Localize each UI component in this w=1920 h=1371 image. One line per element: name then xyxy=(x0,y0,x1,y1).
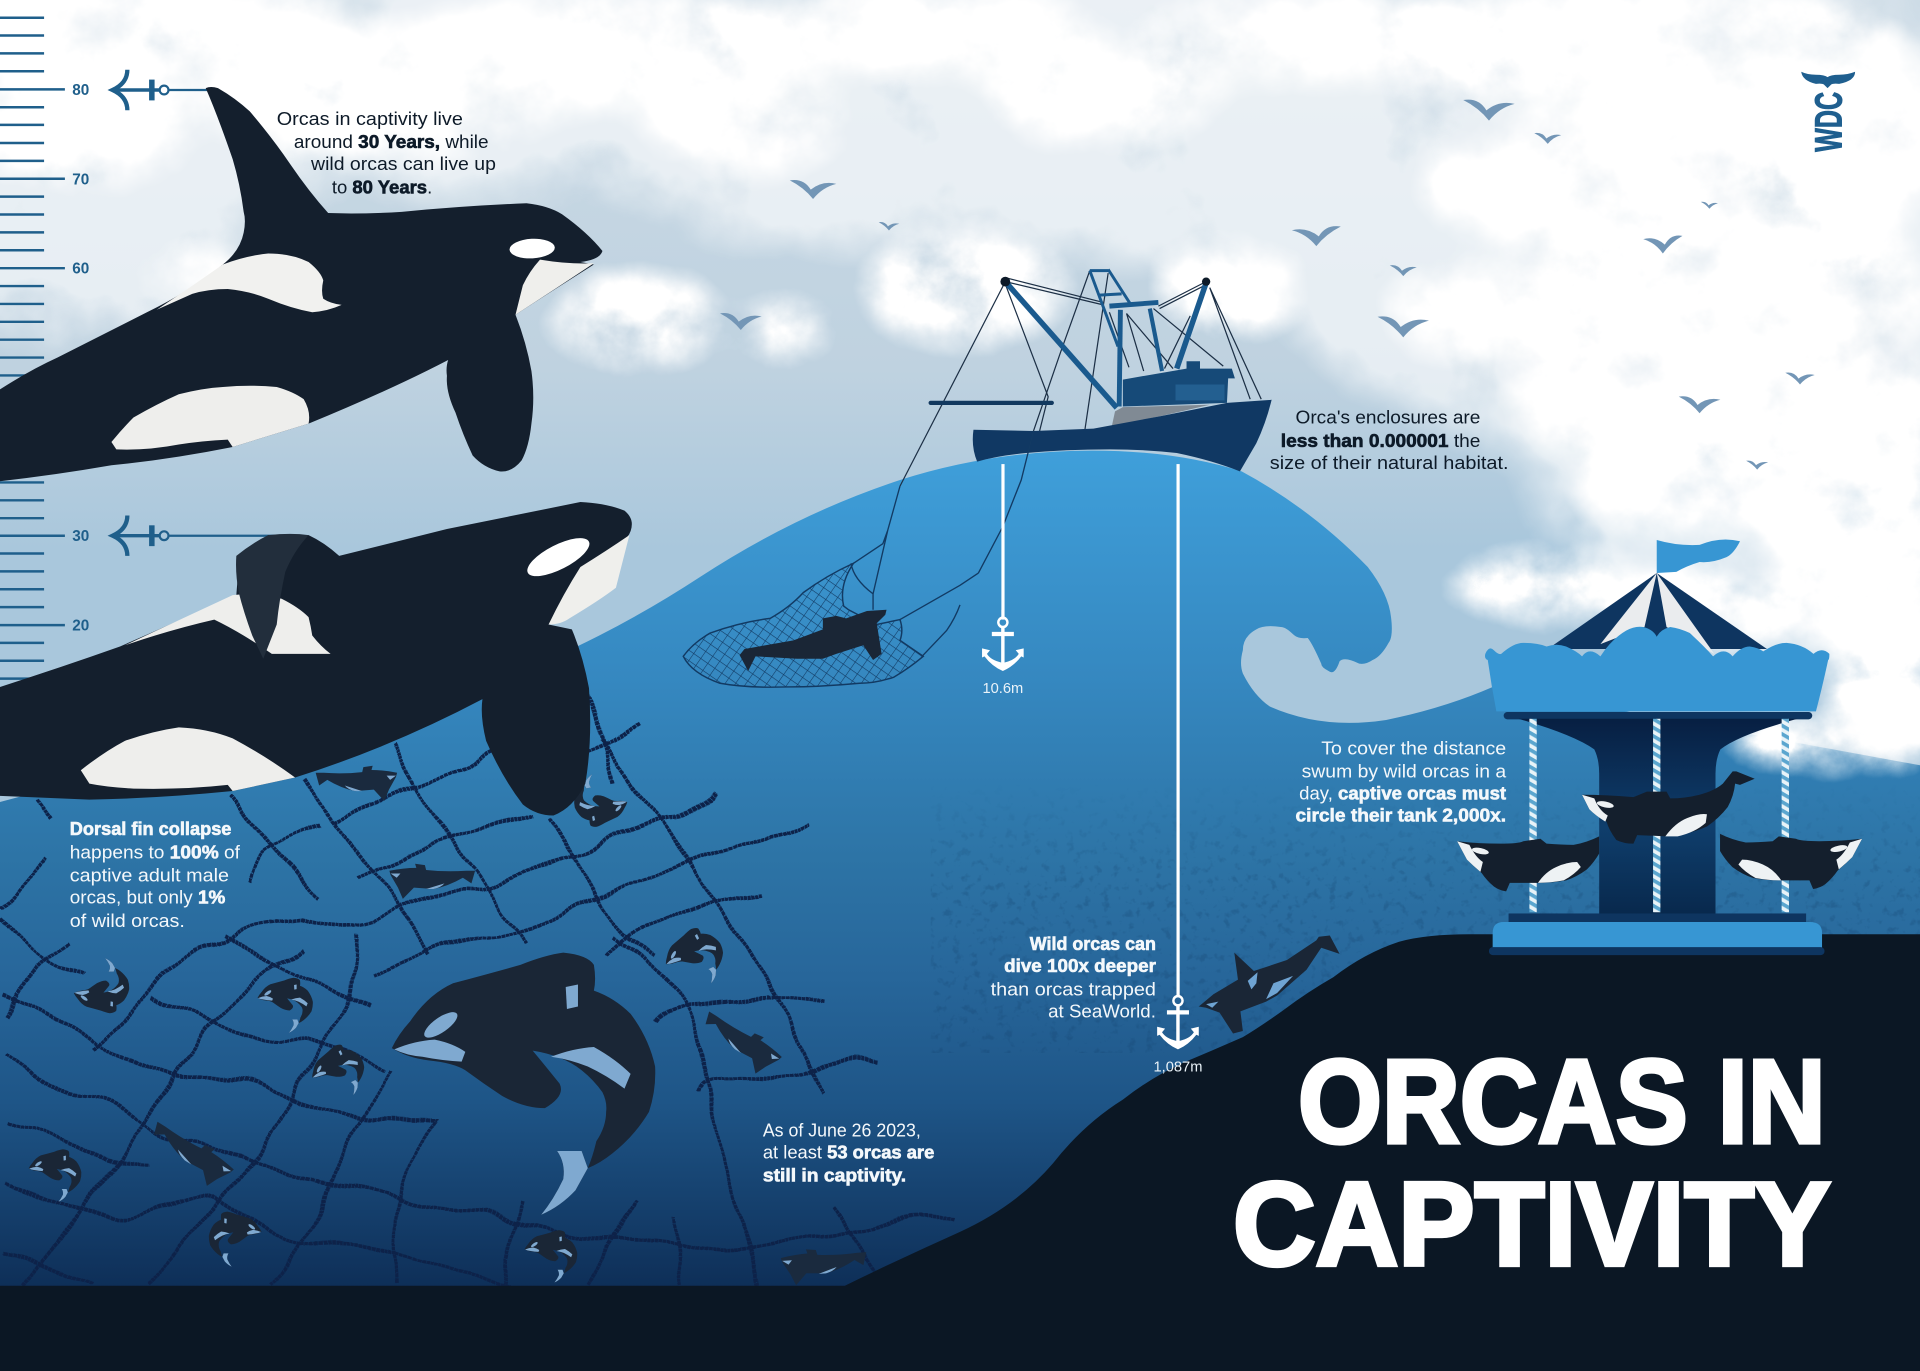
A-frame mast xyxy=(1090,269,1130,347)
text: enclosures: less than 0.000001 the xyxy=(1281,430,1480,451)
text: lifespan: wild orcas can live up xyxy=(310,153,496,174)
striped poles xyxy=(1529,719,1537,912)
text: distance: circle their tank 2,000x. xyxy=(1296,805,1506,826)
eye patch xyxy=(509,238,555,260)
orca with healthy dorsal fin xyxy=(0,87,602,481)
captured orca xyxy=(740,610,887,671)
rigging wires xyxy=(900,271,1261,486)
text: dorsal fin xyxy=(70,818,241,931)
belly patch xyxy=(111,386,309,450)
orca with collapsed dorsal fin xyxy=(0,502,632,816)
text: captivity count: at least 53 orcas are xyxy=(763,1141,934,1162)
text: lifespan: around 30 Years, while xyxy=(294,131,489,152)
logo wordmark: WDC xyxy=(1809,92,1851,152)
canopy rim xyxy=(1504,712,1812,719)
text: distance: swum by wild orcas in a xyxy=(1302,761,1507,782)
depth line and anchor: 10.6m xyxy=(982,464,1024,697)
large curled orca xyxy=(392,953,655,1215)
carousel xyxy=(1457,539,1862,955)
lower jaw xyxy=(516,260,594,315)
scale label 20: 20 xyxy=(72,618,89,635)
text: distance xyxy=(1296,737,1507,826)
cabin xyxy=(1123,361,1235,407)
text: lifespan: to 80 Years. xyxy=(332,176,432,197)
text: dorsal fin: of wild orcas. xyxy=(70,910,185,931)
fishing boat xyxy=(900,269,1272,486)
text: dorsal fin: orcas, but only 1% xyxy=(70,887,225,908)
lower jaw xyxy=(549,535,629,624)
text: enclosures xyxy=(1270,407,1509,473)
small orcas trapped in the net xyxy=(29,766,868,1286)
title: ORCAS IN xyxy=(1298,1035,1826,1168)
roof xyxy=(1548,573,1767,649)
clouds xyxy=(0,0,1920,753)
cloud haze xyxy=(0,0,1920,661)
text: diving depth: than orcas trapped xyxy=(991,979,1156,1000)
scale label 60: 60 xyxy=(72,261,89,278)
centre carousel orca xyxy=(1582,771,1755,844)
text: enclosures: size of their natural habitat. xyxy=(1270,452,1509,473)
text: captivity count xyxy=(763,1119,934,1186)
derrick booms xyxy=(1005,282,1206,408)
text: captivity count: As of June 26 2023, xyxy=(763,1119,921,1140)
text: diving depth: dive 100x deeper xyxy=(1004,955,1156,976)
base xyxy=(1509,913,1806,922)
scale label 70: 70 xyxy=(72,171,89,188)
hull xyxy=(973,400,1272,471)
diving orca xyxy=(1199,936,1340,1033)
trawl bar xyxy=(931,401,1052,405)
text: enclosures: Orca's enclosures are xyxy=(1296,407,1480,428)
text: distance: day, captive orcas must xyxy=(1299,783,1506,804)
text: distance: To cover the distance xyxy=(1321,737,1506,758)
text: dorsal fin: happens to 100% of xyxy=(70,841,241,862)
water speckle texture xyxy=(931,832,1920,1053)
grey deck xyxy=(1112,405,1210,426)
belly patch xyxy=(81,727,295,791)
scale label 80: 80 xyxy=(72,82,89,99)
text: lifespan: Orcas in captivity live xyxy=(277,108,463,129)
WDC logo xyxy=(1801,72,1855,152)
low clouds over right water xyxy=(1727,698,1920,764)
fishing net of ropes xyxy=(0,656,955,1284)
depth line and anchor: 1,087m xyxy=(1153,464,1202,1075)
title: CAPTIVITY xyxy=(1233,1158,1831,1291)
title xyxy=(1233,1035,1831,1291)
saddle patch xyxy=(125,594,331,654)
depth label: 1,087m xyxy=(1153,1059,1202,1075)
central column xyxy=(1518,719,1798,916)
text: dorsal fin: captive adult male xyxy=(70,865,229,886)
ruler scale xyxy=(0,18,89,679)
right carousel orca xyxy=(1720,834,1862,889)
text: diving depth xyxy=(991,933,1156,1022)
birds xyxy=(720,100,1815,470)
text: diving depth: at SeaWorld. xyxy=(1048,1001,1156,1022)
text: captivity count: still in captivity. xyxy=(763,1165,906,1186)
text: lifespan xyxy=(277,108,496,197)
text: diving depth: Wild orcas can xyxy=(1030,933,1156,954)
left carousel orca xyxy=(1457,836,1599,891)
text: dorsal fin: Dorsal fin collapse xyxy=(70,818,231,839)
crown xyxy=(1485,627,1829,711)
saddle patch xyxy=(157,253,342,312)
net with captured orca xyxy=(683,431,1033,687)
anchor marker: 30 years xyxy=(113,516,284,556)
collapsed fin xyxy=(236,534,309,659)
hill and bottom band xyxy=(0,934,1920,1371)
net wires xyxy=(851,431,1033,656)
scale label 30: 30 xyxy=(72,528,89,545)
flag xyxy=(1657,539,1740,573)
depth label: 10.6m xyxy=(982,681,1023,697)
eye patch xyxy=(522,531,594,584)
wave and ocean xyxy=(0,451,1920,1371)
anchor marker: 80 years xyxy=(113,70,208,110)
